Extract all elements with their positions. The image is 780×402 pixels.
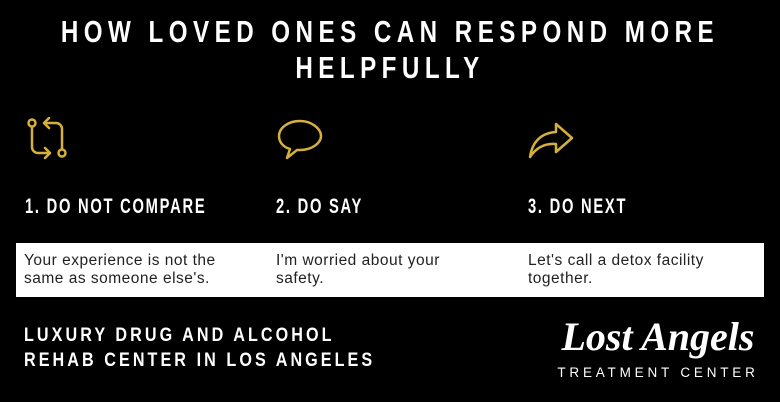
footer text: LUXURY DRUG AND ALCOHOL [24,325,335,346]
text 3 [528,252,704,287]
logo: TREATMENT CENTER [557,365,759,380]
logo [557,314,759,380]
icon: speech bubble [278,120,322,160]
title: HELPFULLY [295,50,485,85]
title [61,14,719,85]
text 1: same as someone else's. [24,270,210,287]
text 2 [276,252,440,287]
footer text [24,325,375,371]
heading 3: 3. DO NEXT [528,195,627,218]
text 1 [24,252,216,287]
heading 2: 2. DO SAY [276,195,363,218]
text 2: safety. [276,270,324,287]
heading 1: 1. DO NOT COMPARE [25,195,206,218]
text 3: together. [528,270,593,287]
icon: compare arrows [27,117,67,160]
text 2: I'm worried about your [276,252,440,269]
text 1: Your experience is not the [24,252,216,269]
logo: Lost Angels [562,314,754,359]
icon: share arrow [528,122,574,158]
title: HOW LOVED ONES CAN RESPOND MORE [61,14,719,49]
footer text: REHAB CENTER IN LOS ANGELES [24,350,375,371]
white band [16,243,764,297]
text 3: Let's call a detox facility [528,252,704,269]
